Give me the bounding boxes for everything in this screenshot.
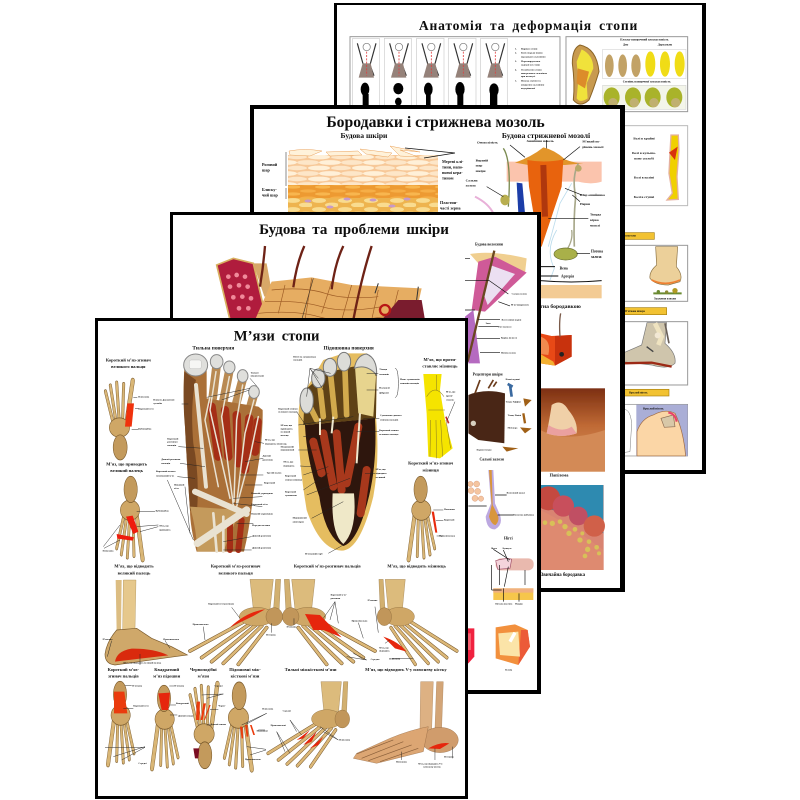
chart: skin receptors diagram: Мейснера	[508, 426, 518, 429]
illustration: plantar muscles of the foot: великого пальця	[278, 411, 298, 414]
illustration: dorsal muscles of the foot: гомілковий м'яз	[156, 475, 174, 478]
illustration: extensor digitorum brevis: Середня	[371, 658, 380, 661]
illustration: abductor hallucis, side view: М'яз, що відводить великий палець	[123, 661, 162, 664]
illustration: plantar muscles of the foot: Поздовжній	[281, 445, 294, 448]
heading: row 3 muscle names: кісткові м’язи	[231, 674, 260, 679]
chart: hair follicle diagram	[465, 243, 529, 363]
illustration: extensor hallucis brevis: П'яткова	[266, 634, 277, 637]
caption: plantar wart: Звичайна бородавка	[541, 573, 586, 578]
heading: adductor hallucis: М’яз, що приводить	[106, 461, 148, 466]
heading: corn structure: Будова стрижневої мозолі	[502, 131, 590, 140]
illustration: plantar muscles of the foot: великий	[376, 476, 386, 479]
illustration: adductor hallucis: М'яз, що	[159, 525, 169, 528]
chart: sebaceous gland diagram: Сальні залози	[479, 457, 505, 461]
panel: pain map along the leg: Болі в коліні	[634, 176, 654, 180]
illustration: flexor digiti minimi brevis: Плюснова	[444, 508, 456, 511]
chart: skin receptors diagram: Тільце Пачіні	[508, 414, 522, 417]
illustration: dorsal muscles of the foot: Передня велика	[252, 524, 271, 527]
box: heel spur illustration	[622, 322, 688, 385]
illustration: skin cross-section block	[217, 246, 425, 320]
illustration: flexor digitorum brevis: Середні	[138, 762, 147, 765]
panel: foot alignment series: поперечного склепіння	[521, 72, 548, 75]
chart: skin layers illustration: тини, напо-	[442, 164, 464, 170]
chart: skin layers illustration	[262, 146, 464, 213]
heading: row 3 muscle names: м’яз підошви	[153, 674, 181, 679]
chart: hair follicle diagram: Сальна залоза	[512, 293, 528, 296]
illustration: dorsal muscles of the foot: відводить мізинець	[265, 443, 287, 446]
heading: row 2 muscle names	[114, 564, 447, 575]
illustration: dorsal muscles of the foot: Короткий м'яз	[251, 503, 268, 506]
heading: opponens digiti minimi: М’яз, що проти-	[424, 357, 457, 362]
chart: corn cross-section illustration: рівень мозолі	[582, 145, 603, 149]
illustration: abductor digiti minimi: М'яз, що	[379, 646, 389, 649]
illustration: extensor digitorum brevis: П'яткова	[287, 625, 297, 628]
illustration: plantar muscles of the foot: Тільця	[379, 368, 388, 371]
illustration: plantar muscles of the foot: Короткий згинач	[278, 407, 298, 410]
illustration: dorsal muscles of the foot: Довгий розгинач	[252, 535, 272, 538]
illustration: dorsal muscles of the foot: розгинач	[167, 441, 178, 444]
icon: red lesion at the fold	[466, 628, 474, 663]
panel: poster 3, skin structure and problems	[170, 212, 541, 694]
caption: papilloma: Папілома	[550, 473, 569, 478]
illustration: opponens digiti minimi in yellow	[422, 357, 458, 458]
illustration: dorsal interossei	[268, 682, 351, 767]
panel: foot alignment series: 4.	[515, 68, 517, 71]
illustration: plantar muscles of the foot: згиначів	[379, 373, 390, 376]
panel: foot alignment series	[350, 37, 560, 108]
chart: skin receptors diagram: Нервові тільця	[477, 449, 492, 452]
illustration: plantar muscles of the foot: М'яз, що	[283, 461, 294, 464]
chart: sebaceous gland diagram: Волосяний канал	[507, 491, 526, 494]
panel: poster 1, foot anatomy and deformity	[334, 3, 706, 474]
chart: skin receptors diagram	[468, 372, 532, 452]
panel: foot alignment series: Болі спереду нижче	[521, 52, 544, 55]
chart: skin layers illustration: Мертві клі-	[442, 159, 464, 164]
illustration: abductor of the fifth metatarsal: П'яткова	[444, 755, 454, 758]
panel: flatfoot diagrams: Дно	[623, 43, 629, 47]
icon: fingertip and nail: Кутикула	[503, 548, 511, 550]
caption: keloid: Келоїд	[505, 668, 513, 671]
illustration: extensor digitorum brevis: Короткий м'яз-	[331, 594, 347, 597]
illustration: quadratus plantae	[152, 685, 194, 768]
illustration: abductor digiti minimi: відводить	[379, 650, 390, 653]
panel: pain map along the leg: Болі в крайні	[633, 136, 655, 140]
illustration: abductor digiti minimi	[368, 579, 457, 664]
illustration: flexor hallucis brevis: Короткий м'яз	[138, 407, 154, 410]
illustration: dorsal muscles of the foot: Короткий	[167, 437, 179, 440]
heading: flexor digiti minimi brevis: Короткий м’яз-згинач	[408, 461, 454, 466]
chart: corn cross-section illustration: шкіри	[476, 169, 486, 173]
illustration: plantar muscles of the foot: сухожилок	[285, 494, 297, 497]
illustration: plantar muscles of the foot: підошовний	[281, 449, 295, 452]
illustration: extensor hallucis brevis: Короткий м'яз-розгинач	[208, 602, 235, 605]
panel: foot alignment series: Плоска ступня та	[521, 80, 542, 83]
panel: flatfoot diagrams: Дорзально	[658, 43, 673, 47]
panel: foot alignment series: опущення склепіння	[521, 83, 545, 86]
chart: skin layers illustration: внені кера-	[442, 170, 463, 175]
illustration: plantar muscles of the foot: згинача пальців	[380, 419, 399, 422]
chart: skin layers illustration: Роговий	[262, 162, 278, 167]
heading: row 2 muscle names: Короткий м’яз-розгинач пальців	[294, 564, 361, 569]
illustration: abductor hallucis, side view	[103, 580, 187, 665]
heading: row 3 muscle names	[108, 667, 448, 679]
chart: hair follicle diagram: Вегетативні нерви	[502, 319, 522, 322]
illustration: dorsal muscles of the foot: Короткий	[264, 481, 276, 484]
panel: foot alignment series: 3.	[515, 60, 517, 63]
illustration: plantar muscles of the foot: приводять	[281, 427, 293, 430]
illustration: extensor digitorum brevis	[282, 579, 380, 664]
heading: row 3 muscle names: м’язи	[198, 674, 209, 679]
chart: hair follicle diagram: Корінь волосся	[501, 337, 518, 340]
chart: corn cross-section illustration	[466, 139, 605, 247]
panel: poster 2, warts and plantar corns	[250, 105, 625, 592]
chart: hair follicle diagram: Потова залоза	[501, 351, 517, 354]
heading: row 3 muscle names: Короткий м’яз-	[108, 667, 139, 672]
illustration: dorsal muscles of the foot: пальців	[161, 462, 171, 465]
illustration: dorsal muscles of the foot: М'яз, що	[265, 439, 276, 442]
illustration: quadratus plantae: Квадратний	[176, 702, 190, 705]
text and figures: lower corn section and wart block: Артерія	[561, 275, 574, 279]
chart: corn cross-section illustration: шар	[476, 164, 482, 168]
illustration: plantar muscles of the foot: Нігті на сухожилках	[293, 355, 317, 358]
chart: corn cross-section illustration: Омозолілість	[477, 140, 498, 144]
illustration: dorsal muscles of the foot: Нижній утримувач	[251, 513, 273, 516]
heading: row 2 muscle names: М’яз, що відводить мізинець	[387, 564, 447, 569]
text and figures: lower corn section and wart block: залоза	[591, 255, 602, 259]
illustration: dorsal muscles of the foot: Ямковий	[174, 484, 185, 487]
photo: papilloma	[540, 388, 605, 472]
illustration: plantar muscles of the foot: фіброзні	[379, 391, 389, 394]
illustration: plantar muscles of the foot: Короткий	[285, 475, 297, 478]
chart: hair follicle diagram: Ріст волосся	[498, 325, 512, 328]
heading: wart lesion: гна бородавкою	[540, 303, 582, 310]
illustration: abductor of the fifth metatarsal: М'яз, що відводить V-у	[418, 762, 443, 765]
illustration: plantar muscles of the foot: Пальцеві	[379, 386, 390, 389]
chart: corn cross-section illustration: кірка	[590, 218, 599, 222]
illustration: dorsal muscles of the foot: суглоби	[153, 402, 163, 405]
illustration: plantar interossei	[224, 682, 274, 769]
illustration: dorsal interossei: Плюснова	[339, 739, 351, 742]
illustration: plantar muscles of the foot: М'язи, що	[281, 424, 293, 427]
icon: fingertip and nail: Нігтьова пластина	[495, 602, 512, 605]
illustration: dorsal muscles of the foot: Плюсне-фалангові	[153, 399, 175, 402]
illustration: dorsal muscles of the foot: Довгий розгинач	[252, 547, 272, 550]
icon: wart skin block	[540, 313, 572, 366]
panel: bunion, heel spur and ingrown nail boxes	[622, 233, 688, 456]
illustration: plantar interossei: Проксимальна	[245, 758, 262, 761]
chart: corn cross-section illustration: залоза	[466, 184, 476, 188]
chart: skin layers illustration: тином	[442, 176, 454, 180]
illustration: opponens digiti minimi in yellow: М'яз, що	[446, 391, 456, 394]
text and figures: lower corn section and wart block: Потова	[591, 250, 603, 254]
illustration: plantar muscles of the foot: великого пальця	[379, 433, 399, 436]
illustration: extensor digitorum brevis: розгинач	[331, 597, 341, 600]
title: warts and corns: Бородавки і стрижнева мозоль	[326, 114, 545, 131]
illustration: flexor digiti minimi brevis: Короткий	[444, 519, 455, 522]
chart: skin layers illustration: шар	[262, 168, 271, 172]
chart: corn cross-section illustration: Тверда	[590, 213, 601, 217]
heading: flexor digiti minimi brevis: мізинця	[422, 467, 439, 472]
chart: skin receptors diagram: Вільні нервові	[506, 378, 520, 381]
illustration: flexor hallucis brevis: Кубоподібна	[138, 427, 152, 430]
box: bunion illustration: Ураження плюсни	[654, 297, 676, 300]
chart: sebaceous gland diagram	[466, 457, 535, 671]
chart: corn cross-section illustration: Нерви	[580, 202, 590, 206]
box: ingrown toenail illustration: Врослий ніготь	[643, 406, 664, 410]
illustration: adductor hallucis: приводить	[159, 529, 171, 532]
chart: corn cross-section illustration: Верхній	[476, 158, 488, 162]
chart: hair follicle diagram: Будова волосини	[475, 243, 504, 247]
illustration: abductor hallucis, side view: П'яткова	[103, 638, 113, 641]
label: yellow tag 3	[622, 389, 669, 396]
illustration: flexor hallucis brevis	[105, 357, 154, 460]
title: muscles of the foot: М’язи стопи	[234, 329, 320, 345]
illustration: quadratus plantae: П'яткова	[174, 685, 185, 688]
heading: row 3 muscle names: Підошовні між-	[229, 667, 261, 672]
illustration: abductor of the fifth metatarsal: Плюснова	[396, 760, 408, 763]
illustration: plantar muscles of the foot: відводить	[376, 472, 387, 475]
illustration: plantar muscles of the foot: пальців	[293, 359, 303, 362]
icon: fingertip and nail: Матрикс	[515, 603, 523, 605]
chart: hair follicle diagram: Зона	[486, 322, 491, 325]
illustration: dorsal muscles of the foot: Короткий малого	[156, 470, 176, 473]
illustration: extensor hallucis brevis	[190, 579, 283, 664]
panel: foot alignment series: Ослаблення стопи	[521, 68, 542, 71]
illustration: dorsal muscles of the foot: Третій малог.	[267, 471, 282, 474]
illustration: plantar muscles of the foot: Короткий згинач	[379, 429, 399, 432]
illustration: plantar muscles of the foot	[278, 352, 420, 555]
illustration: lumbricals: Довгий згинач	[211, 723, 227, 726]
illustration: abductor of the fifth metatarsal	[353, 682, 458, 769]
panel: foot alignment series: 1.	[515, 47, 517, 50]
box: ingrown toenail illustration	[622, 404, 688, 456]
illustration: flexor digitorum brevis	[105, 681, 149, 765]
heading: dorsal surface: Тильна поверхня	[192, 345, 234, 351]
chart: skin layers illustration: часті зерна	[440, 206, 460, 210]
illustration: flexor digiti minimi brevis: Проксимальна	[439, 535, 456, 538]
panel: flatfoot diagrams: Плоско-поперечний плоскостопість	[620, 38, 669, 42]
photo: plantar warts on toes	[536, 485, 605, 570]
chart: sebaceous gland diagram: Волосяна цибулина	[513, 514, 535, 517]
chart: corn cross-section illustration: Сальна	[466, 179, 478, 183]
heading: flexor hallucis brevis: великого пальця	[111, 364, 146, 369]
illustration: plantar muscles of the foot: згинач мізинця	[285, 479, 303, 482]
illustration: dorsal interossei: Середні	[283, 710, 291, 713]
illustration: lumbricals: Черво-	[218, 705, 226, 708]
chart: skin receptors diagram: Рецептори шкіри	[473, 372, 503, 376]
chart: corn cross-section illustration: Шар ошийника	[580, 193, 605, 197]
heading: plantar surface: Підошовна поверхня	[323, 345, 374, 351]
chart: skin layers illustration: Блиску-	[262, 187, 277, 192]
panel: foot alignment series: задньої осі стопи	[521, 64, 540, 67]
lower figures of the muscles poster	[103, 564, 458, 769]
panel: foot alignment series: 2.	[515, 52, 517, 55]
illustration: lumbricals: Середні	[214, 685, 223, 688]
title: foot anatomy and deformity: Анатомія та деформація стопи	[419, 18, 638, 33]
illustration: dorsal muscles of the foot: розгинач	[263, 459, 273, 462]
chart: skin layers illustration: чий шар	[262, 192, 279, 198]
chart: corn cross-section illustration: Зовнішня мозоль	[527, 139, 554, 143]
label: yellow tag 2: П'яткова шпора	[625, 310, 645, 313]
illustration: plantar muscles of the foot: апоневроз	[293, 520, 304, 523]
panel: foot alignment series: переднього склепіння	[521, 55, 546, 58]
illustration: dorsal muscles of the foot: пальців	[167, 444, 177, 447]
icon: fingertip and nail: Ніготь	[491, 547, 497, 550]
text and figures: lower corn section and wart block	[540, 230, 605, 478]
chart: skin layers illustration: Пластин-	[440, 200, 458, 205]
text and figures: lower corn section and wart block: Вена	[560, 267, 568, 271]
illustration: plantar muscles of the foot: згиначів пальців	[400, 382, 420, 385]
icon: fingertip and nail	[491, 547, 534, 605]
heading: row 2 muscle names: Короткий м’яз-розгинач	[211, 564, 261, 569]
box: bunion illustration	[622, 245, 688, 301]
illustration: abductor hallucis, side view: Проксимальна	[163, 638, 180, 641]
illustration: quadratus plantae: Довгий згинач	[178, 715, 194, 718]
chart: corn cross-section illustration: мозолі	[590, 224, 600, 228]
illustration: lumbricals	[190, 684, 227, 769]
illustration: dorsal interossei: Проксимальні	[271, 724, 286, 727]
heading: nails: Нігті	[504, 537, 513, 541]
heading: row 2 muscle names: великого пальця	[218, 570, 253, 575]
illustration: plantar interossei: Плюснова	[262, 707, 274, 710]
illustration: adductor hallucis: Кубоподібна	[156, 510, 169, 513]
heading: opponens digiti minimi: ставляє мізинець	[422, 364, 458, 369]
heading: row 3 muscle names: Квадратний	[154, 667, 179, 672]
illustration: plantar muscles of the foot: Сухожилок довгого	[380, 414, 402, 417]
panel: flatfoot diagrams: Ступінь поперечної плоскостопість	[623, 80, 671, 84]
illustration: adductor hallucis: Плюснова	[103, 550, 114, 553]
illustration: plantar muscles of the foot: палець	[281, 434, 289, 437]
illustration: extensor hallucis brevis: Проксимальна	[193, 623, 209, 626]
illustration: dorsal muscles of the foot: м'яз	[174, 487, 179, 490]
illustration: dorsal muscles of the foot: Тильні	[251, 371, 259, 374]
illustration: flexor digitorum brevis: Короткий м'яз	[133, 705, 149, 708]
heading: adductor hallucis: великий палець	[110, 468, 144, 473]
illustration: abductor digiti minimi: Плюснева	[389, 657, 401, 660]
heading: row 3 muscle names: згинач пальців	[108, 674, 139, 679]
illustration: plantar muscles of the foot: П'ятковий горб	[305, 552, 323, 555]
illustration: dorsal muscles of the foot	[153, 354, 287, 552]
panel: flatfoot diagrams	[566, 37, 688, 112]
panel: foot alignment series: при вальгусі	[521, 75, 536, 78]
illustration: adductor hallucis	[103, 461, 171, 559]
illustration: extensor digitorum brevis: Проксимальна	[352, 620, 368, 623]
heading: row 3 muscle names: Червоподібні	[190, 667, 217, 672]
label: yellow tag 2	[622, 308, 667, 315]
illustration: plantar interossei: Підошовні	[257, 730, 268, 733]
panel: pain map along the leg: Болі в ступні	[634, 195, 654, 199]
label: yellow tag 1: Вальгусна	[623, 235, 636, 238]
illustration: abductor digiti minimi: П'яткова	[368, 599, 378, 602]
panel: foot alignment series: внутрішньої	[521, 87, 535, 90]
illustration: dorsal muscles of the foot: Нижній утримувач	[251, 492, 273, 495]
panel: foot alignment series: 5.	[515, 80, 517, 83]
illustration: dorsal muscles of the foot: міжкісткові	[251, 375, 264, 378]
illustration: flexor digiti minimi brevis	[408, 461, 456, 559]
chart: skin receptors diagram: Тільце Руффіні	[506, 401, 521, 404]
chart: corn cross-section illustration: М'який по-	[582, 140, 601, 144]
chart: hair follicle diagram: М'яз-випрямляч	[511, 303, 529, 306]
illustration: dorsal muscles of the foot: Довгий розгинач	[161, 458, 181, 461]
illustration: dorsal muscles of the foot: Довгий	[263, 455, 271, 458]
heading: row 2 muscle names: великий палець	[118, 570, 151, 575]
panel: pain map along the leg: вому суглобі	[634, 156, 654, 160]
panel: pain map along the leg: Болі в кульшо-	[632, 151, 657, 155]
label: yellow tag 1	[622, 233, 654, 239]
panel: foot alignment series: Перенапруження	[521, 60, 541, 63]
title: skin structure and problems: Будова та проблеми шкіри	[259, 222, 449, 238]
icon: keloid skin block	[496, 624, 530, 665]
illustration: opponens digiti minimi in yellow: ставляє	[446, 399, 454, 402]
heading: row 2 muscle names: М’яз, що відводить	[114, 564, 154, 569]
illustration: plantar muscles of the foot: Короткий	[285, 491, 297, 494]
illustration: plantar muscles of the foot: Плюс сухожилків	[400, 378, 420, 381]
heading: row 3 muscle names: М’яз, що відводить V-у плюсневу кістку	[365, 667, 448, 672]
illustration: plantar muscles of the foot: Підошовний	[293, 516, 307, 519]
panel: pain map along the leg	[622, 126, 688, 206]
illustration: opponens digiti minimi in yellow: проти-	[446, 395, 453, 398]
illustration: flexor digitorum brevis: П'яткова	[132, 685, 143, 688]
illustration: plantar muscles of the foot: відводить	[283, 465, 295, 468]
illustration: flexor hallucis brevis: Плюснова	[138, 395, 150, 398]
heading: skin structure: Будова шкіри	[341, 131, 388, 140]
label: yellow tag 3: Врослий ніготь	[629, 392, 648, 395]
heading: row 3 muscle names: Тильні міжкісткові м’язи	[285, 667, 337, 672]
panel: poster 4, muscles of the foot	[95, 318, 468, 799]
illustration: abductor of the fifth metatarsal: плюсневу кістку	[423, 766, 442, 769]
panel: foot alignment series: Варикоз стопи	[521, 47, 538, 50]
illustration: plantar muscles of the foot: М'яз, що	[376, 468, 386, 471]
illustration: plantar muscles of the foot: великий	[281, 431, 291, 434]
heading: flexor hallucis brevis: Короткий м’яз-згинач	[106, 357, 151, 362]
